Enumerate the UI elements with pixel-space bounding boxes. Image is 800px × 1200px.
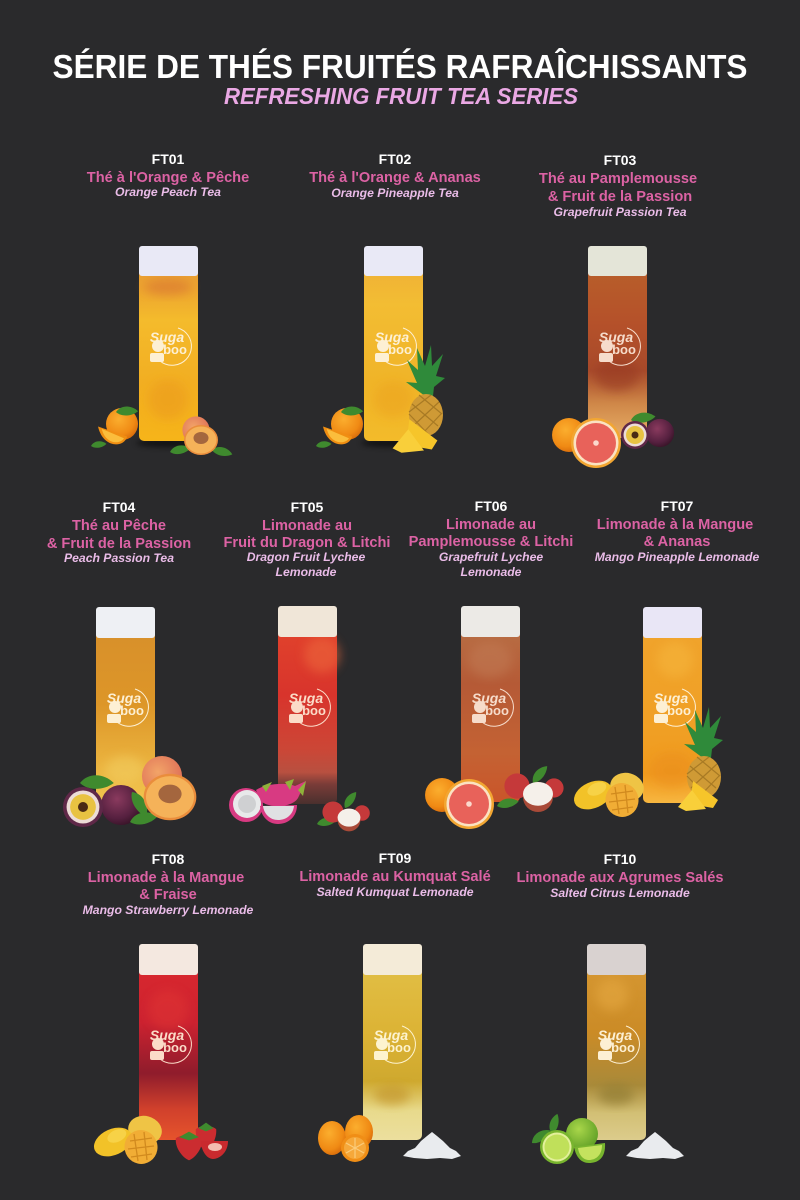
bottle FT09: Suga — [374, 1027, 408, 1043]
heading FT06: Grapefruit Lychee — [439, 550, 543, 564]
heading FT04: Peach Passion Tea — [64, 551, 174, 565]
heading FT06: Pamplemousse & Litchi — [409, 534, 573, 550]
heading FT02: FT02 — [379, 151, 412, 167]
heading FT01 — [87, 151, 249, 199]
heading FT04: & Fruit de la Passion — [47, 536, 191, 552]
heading FT08: FT08 — [152, 851, 185, 867]
icon: salt — [626, 1132, 684, 1159]
heading FT02: Thé à l'Orange & Ananas — [309, 170, 481, 186]
icon: grapefruit — [552, 418, 621, 468]
bottle FT06 — [461, 606, 520, 802]
bottle FT01 — [136, 246, 200, 447]
bottle FT05 — [278, 606, 340, 804]
bottle FT08: boo — [163, 1040, 187, 1055]
heading FT07: Limonade à la Mangue — [597, 517, 753, 533]
heading FT07: FT07 — [661, 498, 694, 514]
heading FT10: FT10 — [604, 851, 637, 867]
icon: pineapple — [678, 707, 723, 811]
panel: FT09 Salted Kumquat Lemonade — [299, 850, 491, 1162]
heading FT01: Thé à l'Orange & Pêche — [87, 170, 249, 186]
bottle FT05: boo — [302, 703, 326, 718]
heading FT06: Lemonade — [461, 565, 522, 579]
title: REFRESHING FRUIT TEA SERIES — [224, 83, 579, 109]
icon: pineapple — [393, 345, 445, 453]
icon: mango — [89, 1112, 165, 1167]
bottle FT02: Suga — [375, 329, 409, 345]
icon: strawberry — [176, 1123, 228, 1160]
heading FT03: Thé au Pamplemousse — [539, 171, 697, 187]
heading FT07: Mango Pineapple Lemonade — [595, 550, 759, 564]
icon: lychee — [316, 789, 370, 831]
panel: FT06 Grapefruit Lychee Lemonade — [409, 498, 573, 829]
heading FT05 — [223, 499, 391, 579]
panel: FT03 Grapefruit Passion Tea — [539, 152, 697, 468]
heading FT02: Orange Pineapple Tea — [331, 186, 459, 200]
icon: lime — [529, 1113, 605, 1164]
bottle FT08 — [139, 944, 198, 1140]
heading FT04: Thé au Pêche — [72, 518, 166, 534]
panel: FT01 Orange Peach Tea — [87, 151, 249, 458]
heading FT10: Salted Citrus Lemonade — [550, 886, 690, 900]
heading FT09: Salted Kumquat Lemonade — [316, 885, 474, 899]
heading FT04 — [47, 499, 191, 565]
heading FT05: Fruit du Dragon & Litchi — [223, 535, 391, 551]
bottle FT09: boo — [387, 1040, 411, 1055]
bottle FT02: boo — [388, 342, 412, 357]
panel: FT05 Dragon Fruit Lychee Lemonade — [223, 499, 391, 831]
icon: kumquat — [318, 1115, 373, 1162]
bottle FT06: Suga — [472, 690, 506, 706]
bottle FT03 — [588, 246, 647, 438]
title — [52, 48, 748, 109]
bottle FT07: boo — [667, 703, 691, 718]
icon: salt — [403, 1132, 461, 1159]
panel: FT08 Mango Strawberry Lemonade — [83, 851, 254, 1167]
bottle FT07: Suga — [654, 690, 688, 706]
bottle FT01: boo — [163, 342, 187, 357]
heading FT05: FT05 — [291, 499, 324, 515]
icon: orange — [90, 406, 138, 449]
heading FT10: Limonade aux Agrumes Salés — [516, 870, 724, 886]
panel: FT10 Salted Citrus Lemonade — [516, 851, 724, 1164]
heading FT08: & Fraise — [139, 887, 197, 903]
heading FT03: Grapefruit Passion Tea — [554, 205, 687, 219]
icon: dragon fruit — [229, 779, 306, 824]
bottle FT05: Suga — [289, 690, 323, 706]
heading FT08: Mango Strawberry Lemonade — [83, 903, 254, 917]
bottle FT02 — [361, 246, 425, 447]
title: SÉRIE DE THÉS FRUITÉS RAFRAÎCHISSANTS — [52, 48, 748, 85]
icon: passion fruit — [63, 775, 141, 827]
bottle FT10: Suga — [598, 1027, 632, 1043]
bottle FT10: boo — [611, 1040, 635, 1055]
panel: FT02 Orange Pineapple Tea — [309, 151, 481, 453]
bottle FT06: boo — [485, 703, 509, 718]
bottle FT10 — [587, 944, 646, 1140]
heading FT01: Orange Peach Tea — [115, 185, 221, 199]
bottle FT07 — [643, 607, 702, 803]
heading FT07 — [595, 498, 759, 564]
icon: peach — [169, 416, 233, 458]
bottle FT09 — [363, 944, 422, 1140]
heading FT05: Dragon Fruit Lychee — [247, 550, 365, 564]
bottle FT01: Suga — [150, 329, 184, 345]
icon: lychee — [496, 763, 564, 812]
icon: passion fruit — [621, 411, 674, 449]
heading FT05: Lemonade — [276, 565, 337, 579]
heading FT04: FT04 — [103, 499, 136, 515]
heading FT05: Limonade au — [262, 518, 352, 534]
icon: peach — [128, 756, 196, 827]
heading FT03: & Fruit de la Passion — [548, 189, 692, 205]
bottle FT04 — [96, 607, 155, 802]
heading FT01: FT01 — [152, 151, 185, 167]
icon: mango — [569, 769, 647, 820]
bottle FT03: Suga — [599, 329, 633, 345]
heading FT09: FT09 — [379, 850, 412, 866]
heading FT06 — [409, 498, 573, 579]
icon: orange — [315, 406, 363, 449]
bottle FT04: boo — [120, 703, 144, 718]
heading FT03: FT03 — [604, 152, 637, 168]
bottle FT03: boo — [612, 342, 636, 357]
bottle FT04: Suga — [107, 690, 141, 706]
heading FT06: Limonade au — [446, 517, 536, 533]
heading FT02 — [309, 151, 481, 200]
panel: FT04 Peach Passion Tea — [47, 499, 196, 827]
panel: FT07 Mango Pineapple Lemonade — [569, 498, 759, 820]
heading FT09 — [299, 850, 491, 899]
heading FT08 — [83, 851, 254, 917]
heading FT03 — [539, 152, 697, 219]
heading FT10 — [516, 851, 724, 900]
bottle FT08: Suga — [150, 1027, 184, 1043]
heading FT06: FT06 — [475, 498, 508, 514]
heading FT09: Limonade au Kumquat Salé — [299, 869, 491, 885]
heading FT08: Limonade à la Mangue — [88, 870, 244, 886]
icon: grapefruit — [425, 778, 494, 829]
heading FT07: & Ananas — [644, 534, 710, 550]
